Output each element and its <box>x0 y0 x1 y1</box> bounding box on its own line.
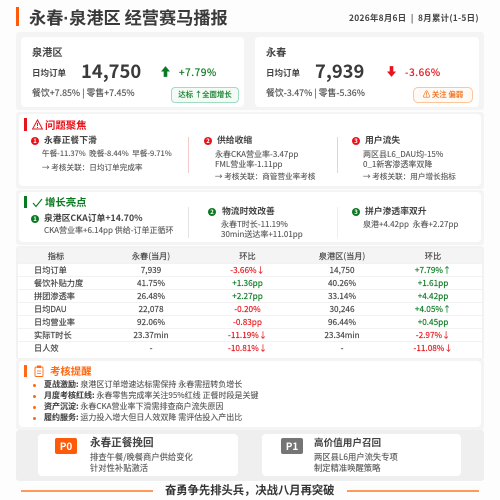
item 1 <box>31 133 172 173</box>
item detail: FML营业率-1.11pp <box>215 159 282 170</box>
row: 日均营业率: 96.44% <box>328 316 356 328</box>
number badge <box>31 137 39 145</box>
number badge: 2 <box>206 136 210 145</box>
reminder 1: 夏战激励: 泉港区订单增速达标需保持 永春需扭转负增长 <box>44 379 242 390</box>
row: 拼团渗透率 <box>18 290 482 302</box>
item 1 <box>31 211 174 236</box>
order value: 7,939 <box>315 58 364 84</box>
item title: 用户流失 <box>365 133 400 146</box>
icon: check <box>32 198 42 208</box>
item detail: CKA营业率+6.14pp 供给-订单正循环 <box>44 225 174 236</box>
row: 日均DAU: 日均DAU <box>34 303 67 315</box>
row: 日人效: 日人效 <box>34 342 59 354</box>
row: 日均订单: 7,939 <box>141 264 161 276</box>
row: 日人效: - <box>341 342 343 354</box>
row: 餐饮补贴力度: 40.26% <box>328 277 356 289</box>
order label: 日均订单 <box>32 67 66 79</box>
row: 餐饮补贴力度 <box>18 277 482 289</box>
P1 badge <box>281 438 303 454</box>
reminder 2: 月度考核红线: 永春零售完成率关注95%红线 正餐时段是关键 <box>44 390 258 401</box>
action title: 永春正餐挽回 <box>90 435 154 450</box>
item detail: 两区县L6_DAU均-15% <box>363 149 443 160</box>
order value: 14,750 <box>81 58 141 84</box>
row: 拼团渗透率: +4.42pp <box>418 290 448 302</box>
card name: 泉港区 <box>32 44 63 59</box>
row: 日均营业率: 日均营业率 <box>34 316 75 328</box>
action detail <box>314 451 398 474</box>
item detail: 永春CKA营业率-3.47pp <box>215 149 298 160</box>
item title: 拼户渗透率双升 <box>365 204 427 217</box>
inner card <box>19 114 481 186</box>
item 2 <box>208 204 303 240</box>
heading: 问题聚焦 <box>45 117 87 132</box>
status badge <box>413 87 473 103</box>
category changes: 餐饮-3.47% | 零售-5.36% <box>266 86 365 99</box>
card name: 永春 <box>266 44 286 59</box>
item title: 供给收缩 <box>217 133 252 146</box>
table header: 泉港区(当月) <box>319 250 365 262</box>
P0 badge <box>55 438 77 454</box>
assessment link: → 考核关联：用户增长指标 <box>363 171 456 182</box>
category changes: 餐饮+7.85% | 零售+7.45% <box>32 86 135 99</box>
row: 日均DAU: +4.05%↑ <box>415 303 451 315</box>
item detail: 午餐-11.37% 晚餐-8.44% 早餐-9.71% <box>42 148 172 159</box>
row: 日均订单: 日均订单 <box>34 264 67 276</box>
assessment link: → 考核关联：商管营业率考核 <box>215 171 315 182</box>
row: 日均订单: +7.79%↑ <box>415 264 451 276</box>
item detail: 永春T时长-11.19% <box>221 219 288 230</box>
inner card <box>19 361 481 427</box>
inner card <box>19 192 481 242</box>
divider <box>337 207 338 238</box>
icon: warning triangle <box>32 119 43 130</box>
row: 实际T时长: -2.97%↓ <box>416 329 450 341</box>
action detail: 制定精准唤醒策略 <box>314 462 380 474</box>
number badge: 3 <box>354 136 358 145</box>
row: 餐饮补贴力度: 41.75% <box>137 277 165 289</box>
row: 日人效: -10.81%↓ <box>228 342 267 354</box>
number badge <box>31 215 39 223</box>
row: 日均DAU <box>18 303 482 315</box>
change value: -3.66% <box>405 64 441 79</box>
action detail: 针对性补贴激活 <box>90 462 148 474</box>
item title: 泉港区CKA订单+14.70% <box>44 211 143 224</box>
item 3 <box>352 133 456 182</box>
icon: down arrow <box>387 66 396 77</box>
reminder 3: 资产沉淀: 永春CKA营业率下滑需排查商户流失原因 <box>44 401 223 412</box>
heading bar <box>24 365 27 377</box>
title accent bar <box>16 7 19 26</box>
item detail <box>363 149 443 170</box>
action detail <box>90 451 193 474</box>
order label: 日均订单 <box>266 67 300 79</box>
item detail: 泉港+4.42pp 永春+2.27pp <box>363 219 458 230</box>
action title: 高价值用户召回 <box>314 435 381 449</box>
row: 日人效: -11.08%↓ <box>413 342 453 354</box>
date range: 2026年8月6日 | 8月累计(1-5日) <box>349 12 479 24</box>
number badge: 3 <box>354 207 358 216</box>
panel: metrics table <box>16 246 484 360</box>
panel: 考核提醒 <box>16 359 484 430</box>
row: 拼团渗透率: 26.48% <box>137 290 165 302</box>
icon: clipboard <box>34 366 44 377</box>
item title: 永春正餐下滑 <box>44 133 97 146</box>
row: 日均DAU: 22,078 <box>138 303 164 315</box>
table header <box>18 248 482 263</box>
number badge: 2 <box>210 207 214 216</box>
item detail: 30min送达率+11.01pp <box>221 229 303 240</box>
row: 日均订单: -3.66%↓ <box>230 264 265 276</box>
reminder 4: 履约服务: 运力投入增大但日人效双降 需评估投入产出比 <box>44 412 242 423</box>
row: 餐饮补贴力度: 餐饮补贴力度 <box>34 277 83 289</box>
table header: 指标 <box>48 250 64 262</box>
icon: up arrow <box>161 66 170 77</box>
row: 实际T时长: -11.19%↓ <box>228 329 267 341</box>
table header: 环比 <box>425 250 441 262</box>
row: 拼团渗透率: 拼团渗透率 <box>34 290 75 302</box>
row: 日均订单: 14,750 <box>330 264 354 276</box>
footer line right <box>347 490 479 492</box>
heading: 增长亮点 <box>45 194 87 209</box>
title: 永春·泉港区 经营赛马播报 <box>29 4 228 29</box>
footer line left <box>21 490 153 492</box>
status badge: ⚠ 关注 偏弱 <box>423 89 463 100</box>
action detail: 两区县L6用户流失专项 <box>314 451 398 463</box>
row: 实际T时长 <box>18 329 482 341</box>
row: 实际T时长: 实际T时长 <box>34 329 72 341</box>
row: 实际T时长: 23.34min <box>324 329 360 341</box>
action detail: 排查午餐/晚餐商户供给变化 <box>90 451 193 463</box>
status badge: 达标 ↑全面增长 <box>178 89 232 100</box>
assessment link: → 考核关联：日均订单完成率 <box>42 162 142 173</box>
heading: 考核提醒 <box>50 363 92 378</box>
footer slogan: 奋勇争先排头兵，决战八月再突破 <box>165 482 334 498</box>
item detail <box>215 149 298 170</box>
row: 日均营业率: 92.06% <box>137 316 165 328</box>
divider <box>337 137 338 173</box>
item 3 <box>352 204 458 230</box>
row: 日人效: - <box>150 342 152 354</box>
panel: district KPI cards <box>16 32 484 110</box>
card: 永春 <box>255 37 479 107</box>
card: 泉港区 <box>21 37 244 107</box>
P0 badge: P0 <box>60 438 72 453</box>
card: P0 <box>38 434 238 476</box>
reminder list <box>33 379 258 423</box>
panel: action priorities <box>16 430 484 481</box>
divider <box>188 137 189 173</box>
row: 拼团渗透率: 33.14% <box>328 290 356 302</box>
number badge <box>352 137 360 145</box>
card: P1 <box>262 434 461 476</box>
row: 日均DAU: 30,246 <box>330 303 354 315</box>
number badge: 1 <box>33 214 37 223</box>
table header: 环比 <box>239 250 256 262</box>
number badge: 1 <box>33 136 37 145</box>
row: 日人效 <box>18 342 482 358</box>
item detail: 0_1新客渗透率双降 <box>363 159 432 170</box>
row: 实际T时长: 23.37min <box>133 329 169 341</box>
heading bar <box>24 196 27 208</box>
divider <box>188 207 189 238</box>
number badge <box>208 208 216 216</box>
table header: 永春(当月) <box>132 250 170 262</box>
row: 日均DAU: -0.20% <box>234 303 261 315</box>
heading bar <box>24 118 27 131</box>
number badge <box>352 208 360 216</box>
row: 日均营业率: -0.83pp <box>233 316 262 328</box>
row: 餐饮补贴力度: +1.61pp <box>418 277 448 289</box>
item title: 物流时效改善 <box>222 204 275 217</box>
status badge <box>171 87 239 103</box>
P1 badge: P1 <box>286 438 298 453</box>
item detail <box>221 219 303 240</box>
row: 日均订单 <box>18 264 482 276</box>
panel: 增长亮点 <box>16 190 484 245</box>
item 2 <box>204 133 316 182</box>
row: 日均营业率 <box>18 316 482 328</box>
change value: +7.79% <box>179 64 217 79</box>
row: 日均营业率: +0.45pp <box>418 316 448 328</box>
number badge <box>204 137 212 145</box>
panel: 问题聚焦 <box>16 112 484 189</box>
row: 餐饮补贴力度: +1.36pp <box>232 277 263 289</box>
row: 拼团渗透率: +2.27pp <box>232 290 263 302</box>
